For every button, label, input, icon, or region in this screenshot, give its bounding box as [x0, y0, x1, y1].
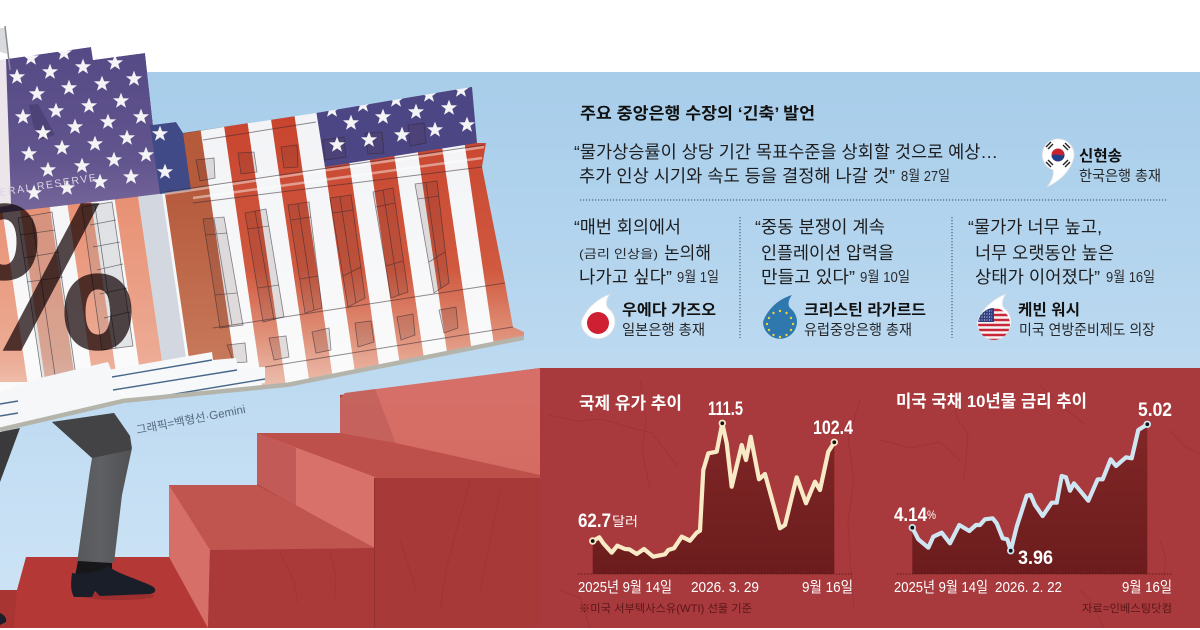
yield line — [912, 424, 1147, 551]
stars — [9, 45, 475, 200]
name: Warsh — [1018, 301, 1155, 339]
chart: US 10-year yield: 9월 16일 — [1122, 579, 1172, 596]
chart: oil price: 2026. 3. 29 — [691, 579, 759, 596]
oil area — [593, 423, 834, 574]
central windows — [18, 202, 133, 378]
quote: Ueda: 나가고 싶다” — [579, 267, 672, 287]
third tread — [257, 433, 540, 478]
back riser — [340, 368, 540, 476]
yield area — [912, 424, 1147, 574]
grey marble stripe — [138, 193, 186, 362]
quote: Lagarde: 9월 10일 — [860, 269, 910, 286]
credit: 그래픽=백형선·Gemini — [135, 403, 247, 437]
quote: Warsh: “물가가 너무 높고, — [968, 217, 1102, 237]
base shadow edge — [0, 338, 524, 430]
quote: Ueda: “매번 회의에서 — [574, 217, 681, 237]
chart: US 10-year yield: 4.14 — [894, 505, 927, 526]
name: Lagarde: 유럽중앙은행 총재 — [804, 322, 912, 339]
name: Ueda: 일본은행 총재 — [622, 322, 705, 339]
yield title: 미국 국채 10년물 금리 추이 — [896, 392, 1087, 411]
oil markers — [590, 420, 837, 544]
shoe — [71, 566, 155, 597]
chart: oil price: 102.4 — [813, 418, 853, 439]
name: Shin Hyun-song: 한국은행 총재 — [1079, 168, 1161, 185]
name: Lagarde — [804, 301, 926, 339]
right leg — [52, 413, 132, 563]
shoe shadow — [82, 592, 154, 600]
statue shadow — [29, 104, 55, 140]
white base — [42, 362, 111, 382]
name: Ueda — [622, 301, 716, 339]
quote: Warsh: 상태가 이어졌다” — [975, 267, 1100, 287]
oil line — [593, 423, 834, 557]
oil title: 국제 유가 추이 — [579, 394, 682, 413]
chart: oil price: 9월 16일 — [802, 579, 853, 596]
yield markers — [910, 422, 1150, 554]
left canton — [0, 47, 190, 213]
quote: Ueda: 9월 1일 — [677, 269, 719, 286]
oil values: 111.5 — [708, 399, 743, 420]
oil dates: 2025년 9월 14일 — [578, 579, 672, 596]
chart: US 10-year yield: 2026. 2. 22 — [995, 579, 1062, 596]
quote: Lagarde: “중동 분쟁이 계속 — [755, 217, 885, 237]
chart: US 10-year yield: 3.96 — [1018, 548, 1053, 569]
data panel: red marble base — [540, 368, 1200, 628]
flag pole — [0, 26, 10, 70]
name: Warsh: 미국 연방준비제도 의장 — [1019, 322, 1155, 339]
name: Ueda: 우에다 가즈오 — [622, 301, 716, 319]
icon: EU flag comma — [763, 295, 797, 339]
quotes heading: 주요 중앙은행 수장의 ‘긴축’ 발언 — [580, 103, 815, 123]
chart: oil price: 62.7 — [578, 511, 611, 532]
yield dates: 2025년 9월 14일 — [894, 579, 988, 596]
first riser — [169, 485, 210, 628]
second tread — [169, 485, 375, 551]
quote: Shin Hyun-song: 8월 27일 — [901, 168, 950, 185]
first front — [208, 548, 374, 628]
figure: trousers and shoes — [0, 413, 155, 625]
flag stripes — [0, 88, 524, 385]
quote: Ueda — [574, 217, 719, 287]
quote: Shin Hyun-song — [574, 142, 998, 186]
quote: Shin Hyun-song: 추가 인상 시기와 속도 등을 결정해 나갈 것” — [579, 166, 895, 186]
building inscription: ERAL RESERVE — [0, 172, 98, 199]
floor — [0, 557, 212, 628]
quote: Lagarde: 만들고 있다” — [761, 267, 855, 287]
front steps — [111, 352, 265, 384]
name: Warsh: 케빈 워시 — [1018, 301, 1080, 319]
quote: Shin Hyun-song: “물가상승률이 상당 기간 목표수준을 상회할 것으로 예상… — [574, 142, 998, 162]
second riser — [257, 433, 375, 549]
chart: US 10-year yield: % — [927, 508, 936, 522]
icon: Japan flag comma — [581, 294, 615, 339]
entablature lines — [165, 87, 513, 367]
quote: Warsh: 9월 16일 — [1106, 269, 1155, 286]
name: Lagarde: 크리스틴 라가르드 — [804, 301, 926, 319]
chart: oil price — [578, 394, 853, 615]
quote: Ueda: (금리 인상을) — [579, 247, 658, 261]
yield source: 자료=인베스팅닷컴 — [1082, 602, 1172, 615]
large windows — [196, 123, 458, 363]
yield values: 5.02 — [1138, 400, 1172, 421]
chart: oil price: 달러 — [612, 514, 638, 529]
left shoe tip — [0, 613, 6, 625]
quote: Lagarde — [755, 217, 910, 287]
oil footnote: ※미국 서부텍사스유(WTI) 선물 기준 — [579, 602, 752, 615]
icon: Korean flag comma — [1042, 139, 1074, 187]
quote: Warsh: 너무 오랫동안 높은 — [975, 243, 1114, 263]
quote: Ueda: 논의해 — [664, 243, 711, 263]
right canton — [316, 85, 477, 167]
sock — [75, 561, 112, 576]
quote: Warsh — [968, 217, 1155, 287]
red stairs — [0, 368, 540, 628]
left leg — [0, 428, 20, 482]
icon: US flag comma — [977, 294, 1011, 341]
quote: Lagarde: 인플레이션 압력을 — [761, 243, 894, 263]
building with flag overlay — [0, 26, 562, 440]
pale left edge — [0, 59, 11, 207]
chart: US 10-year yield — [894, 392, 1172, 615]
name: Shin Hyun-song: 신현송 — [1079, 147, 1122, 165]
name: Shin Hyun-song — [1079, 147, 1161, 185]
